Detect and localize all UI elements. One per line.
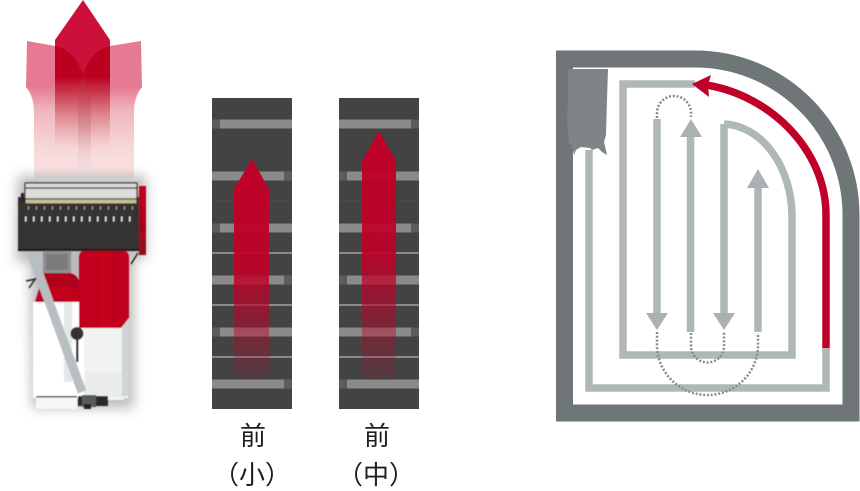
label: front medium: 前	[364, 421, 390, 451]
label: front small: 前	[240, 421, 266, 451]
label: front medium	[337, 421, 415, 490]
panel: front small	[212, 98, 292, 490]
forward arrow medium	[362, 131, 396, 380]
field strip	[212, 98, 292, 409]
outer gray route	[589, 150, 826, 388]
grain tank: main red hood	[79, 250, 129, 328]
combine drop shadow	[16, 176, 146, 408]
label: front small: （小）	[213, 460, 291, 490]
label: front small	[213, 421, 291, 490]
engine and tail unit	[78, 395, 108, 409]
field strip	[339, 98, 419, 409]
header with reel	[18, 183, 146, 255]
steering wheel and column	[70, 327, 84, 362]
dotted turn paths	[657, 96, 758, 395]
red route with arrow	[692, 75, 826, 348]
combine machine	[18, 183, 146, 409]
second gray route	[623, 84, 792, 355]
label: front medium: （中）	[337, 460, 415, 490]
illustration: combine with three forward arrows	[16, 0, 146, 409]
grain tank: left red housing	[35, 273, 79, 302]
arrows: left, right and centre cutting directions	[26, 0, 142, 178]
field boundary	[564, 59, 851, 413]
unloading auger	[32, 255, 82, 392]
forward arrow small	[234, 159, 269, 380]
diagram: field harvesting route	[564, 59, 851, 413]
feeder	[43, 249, 71, 273]
combine body	[33, 290, 129, 409]
combine silhouette	[567, 69, 608, 155]
route arrows	[646, 119, 769, 332]
divider marks	[26, 253, 138, 288]
panel: front medium	[337, 98, 419, 490]
